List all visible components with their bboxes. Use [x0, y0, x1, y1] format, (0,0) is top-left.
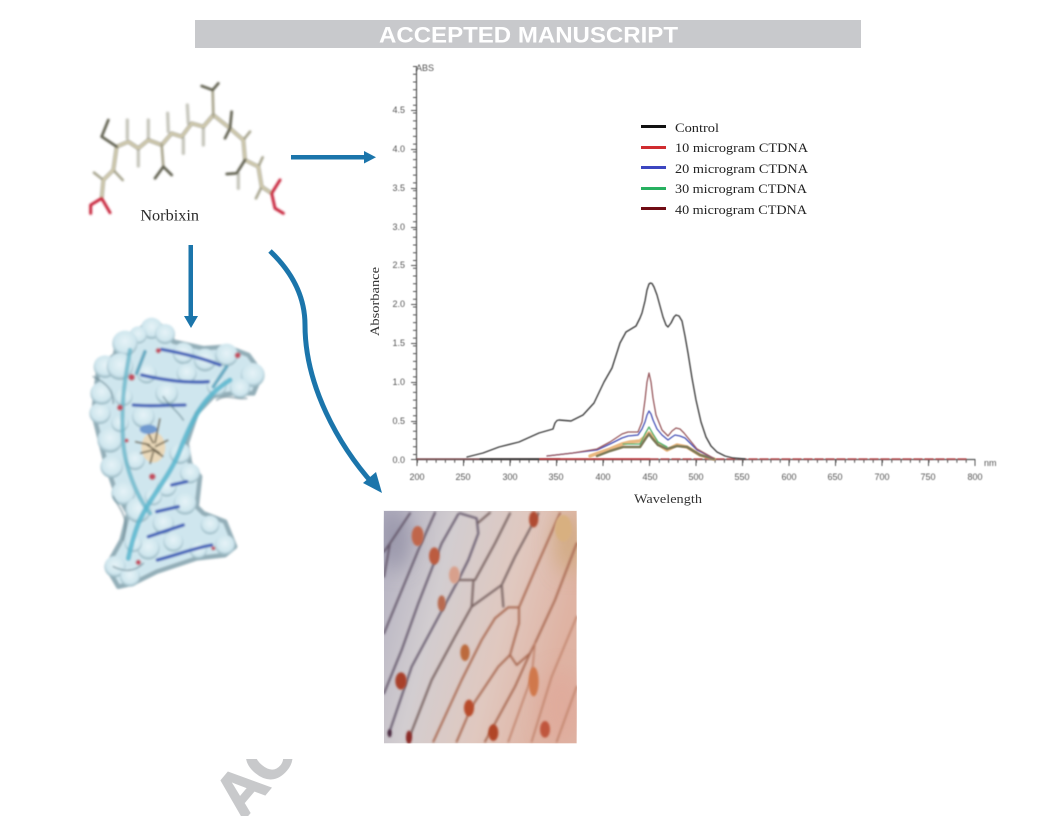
molecule sticks [91, 83, 283, 213]
cell nuclei [412, 526, 424, 546]
bound norbixin ligand [135, 418, 168, 464]
axes [411, 66, 975, 466]
micrograph: stained cells [378, 510, 582, 744]
spectrum curves [417, 283, 968, 459]
y axis labels: 0.0 [392, 455, 405, 465]
molecule: norbixin structure [91, 83, 283, 225]
x axis labels: 500 [688, 472, 704, 482]
x axis title: Wavelength [634, 491, 703, 506]
unit labels [416, 63, 997, 468]
legend: 20 microgram [641, 162, 808, 176]
x axis labels: 550 [734, 472, 750, 482]
y axis labels: 2.5 [392, 260, 405, 270]
y axis labels: 4.0 [392, 144, 405, 154]
legend: control: Control [675, 121, 720, 135]
y axis labels: 2.0 [392, 299, 405, 309]
y axis labels: 3.0 [392, 222, 405, 232]
x axis labels: 650 [827, 472, 843, 482]
x axis labels: 700 [874, 472, 890, 482]
legend: 30 microgram: 30 microgram CTDNA [675, 182, 807, 196]
x axis labels [409, 472, 983, 482]
arrow: molecule to spectrum [291, 151, 376, 164]
x axis labels: 800 [967, 472, 983, 482]
absorbance spectrum chart [367, 63, 997, 506]
unit labels: nm [984, 458, 997, 468]
y axis labels: 1.5 [392, 338, 405, 348]
x axis labels: 400 [595, 472, 611, 482]
y axis title: Absorbance [367, 267, 382, 336]
y axis labels [392, 105, 405, 465]
unit labels: ABS [416, 63, 434, 73]
x axis labels: 450 [642, 472, 658, 482]
y axis labels: 0.5 [392, 416, 405, 426]
arrow: molecule to cell micrograph [270, 251, 382, 493]
header banner [195, 20, 861, 48]
arrow: molecule to DNA [184, 245, 198, 328]
x axis labels: 350 [548, 472, 564, 482]
DNA surface model with bound ligand [89, 318, 265, 587]
molecule name label: Norbixin [140, 208, 199, 225]
x axis labels: 300 [502, 472, 518, 482]
y axis labels: 4.5 [392, 105, 405, 115]
legend: 20 microgram: 20 microgram CTDNA [675, 162, 808, 176]
legend [641, 121, 808, 217]
x axis labels: 200 [409, 472, 425, 482]
legend: 10 microgram: 10 microgram CTDNA [675, 141, 808, 155]
legend: control [641, 121, 720, 135]
header banner: ACCEPTED MANUSCRIPT [379, 22, 679, 48]
legend: 10 microgram [641, 141, 808, 155]
x axis labels: 250 [455, 472, 471, 482]
y axis labels: 1.0 [392, 377, 405, 387]
x axis labels: 600 [781, 472, 797, 482]
x axis labels: 750 [920, 472, 936, 482]
y axis labels: 3.5 [392, 183, 405, 193]
legend: 40 microgram: 40 microgram CTDNA [675, 203, 807, 217]
